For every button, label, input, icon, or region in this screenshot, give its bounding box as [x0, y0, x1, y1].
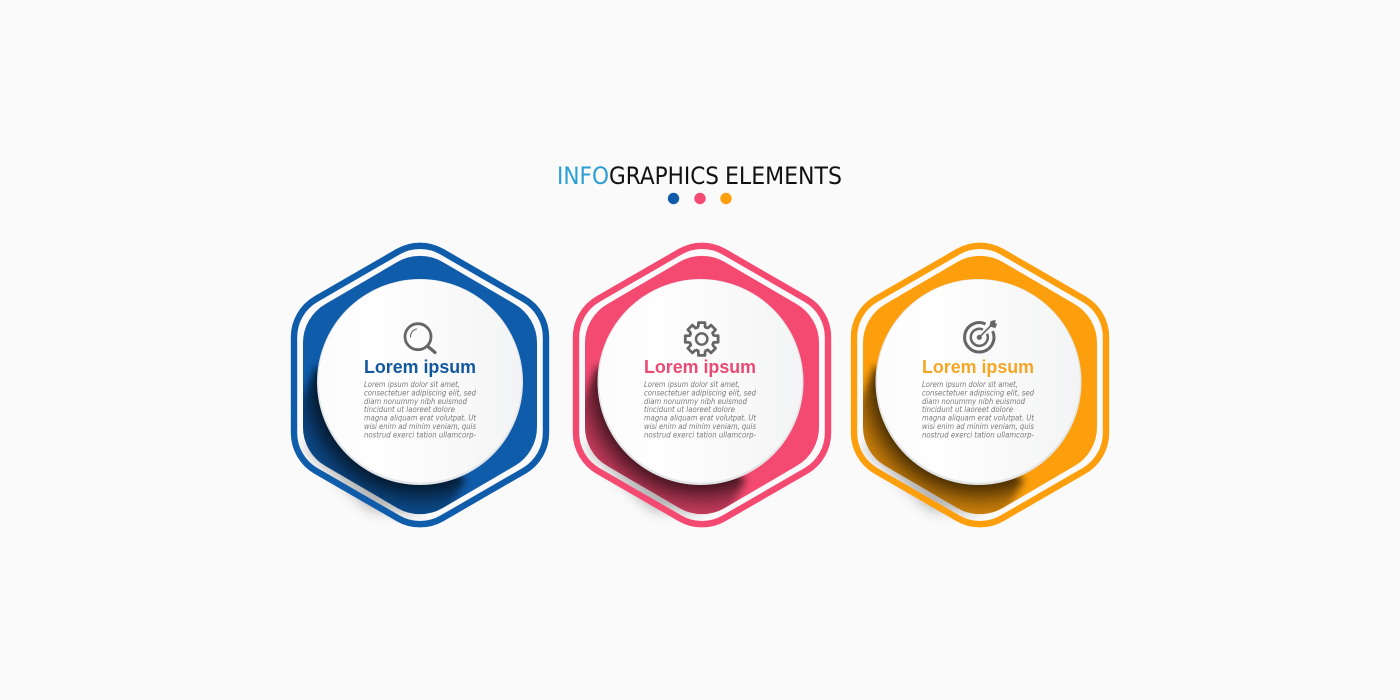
- body text: wisi enim ad minim veniam, quis: [644, 422, 756, 431]
- body text: magna aliquam erat volutpat. Ut: [364, 414, 477, 423]
- long shadow: [577, 365, 746, 525]
- body text: consectetuer adipiscing elit, sed: [364, 388, 476, 397]
- body text: nostrud exerci tation ullamcorp-: [922, 430, 1034, 439]
- heading: Lorem ipsum: [644, 356, 756, 377]
- long shadow: [295, 365, 466, 525]
- heading: Lorem ipsum: [922, 356, 1034, 377]
- body text: Lorem ipsum dolor sit amet,: [644, 380, 740, 389]
- inner hexagon: [585, 256, 819, 514]
- white disc: [317, 279, 523, 485]
- body text: consectetuer adipiscing elit, sed: [644, 388, 756, 397]
- white disc: [598, 279, 804, 485]
- body text: [922, 380, 1035, 439]
- inner hexagon: [303, 256, 537, 514]
- body text: wisi enim ad minim veniam, quis: [922, 422, 1034, 431]
- body text: nostrud exerci tation ullamcorp-: [364, 430, 476, 439]
- panel: pink hexagon card: [576, 246, 828, 525]
- outer hexagon ring: [854, 246, 1106, 524]
- body text: tincidunt ut laoreet dolore: [644, 405, 735, 414]
- body text: tincidunt ut laoreet dolore: [922, 405, 1013, 414]
- title: INFO: [557, 162, 609, 190]
- inner hexagon: [863, 256, 1097, 514]
- icon: target with arrow: [965, 320, 996, 352]
- body text: wisi enim ad minim veniam, quis: [364, 422, 476, 431]
- title: ELEMENTS: [725, 162, 842, 190]
- heading: Lorem ipsum: [364, 356, 476, 377]
- title: GRAPHICS: [609, 162, 719, 190]
- body text: tincidunt ut laoreet dolore: [364, 405, 455, 414]
- body text: Lorem ipsum dolor sit amet,: [922, 380, 1018, 389]
- white disc: [876, 279, 1082, 485]
- body text: magna aliquam erat volutpat. Ut: [922, 414, 1035, 423]
- long shadow: [855, 365, 1024, 525]
- body text: diam nonummy nibh euismod: [644, 397, 747, 406]
- outer hexagon ring: [576, 246, 828, 524]
- title colour dots: [668, 193, 732, 204]
- icon: magnifier: [405, 324, 435, 352]
- title: [557, 162, 842, 190]
- body text: magna aliquam erat volutpat. Ut: [644, 414, 757, 423]
- body text: Lorem ipsum dolor sit amet,: [364, 380, 460, 389]
- icon: gear: [685, 323, 718, 355]
- outer hexagon ring: [294, 246, 546, 524]
- panel: blue hexagon card: [294, 246, 546, 525]
- body text: [364, 380, 477, 439]
- body text: consectetuer adipiscing elit, sed: [922, 388, 1034, 397]
- body text: nostrud exerci tation ullamcorp-: [644, 430, 756, 439]
- body text: diam nonummy nibh euismod: [364, 397, 467, 406]
- body text: [644, 380, 757, 439]
- panel: orange hexagon card: [854, 246, 1106, 525]
- body text: diam nonummy nibh euismod: [922, 397, 1025, 406]
